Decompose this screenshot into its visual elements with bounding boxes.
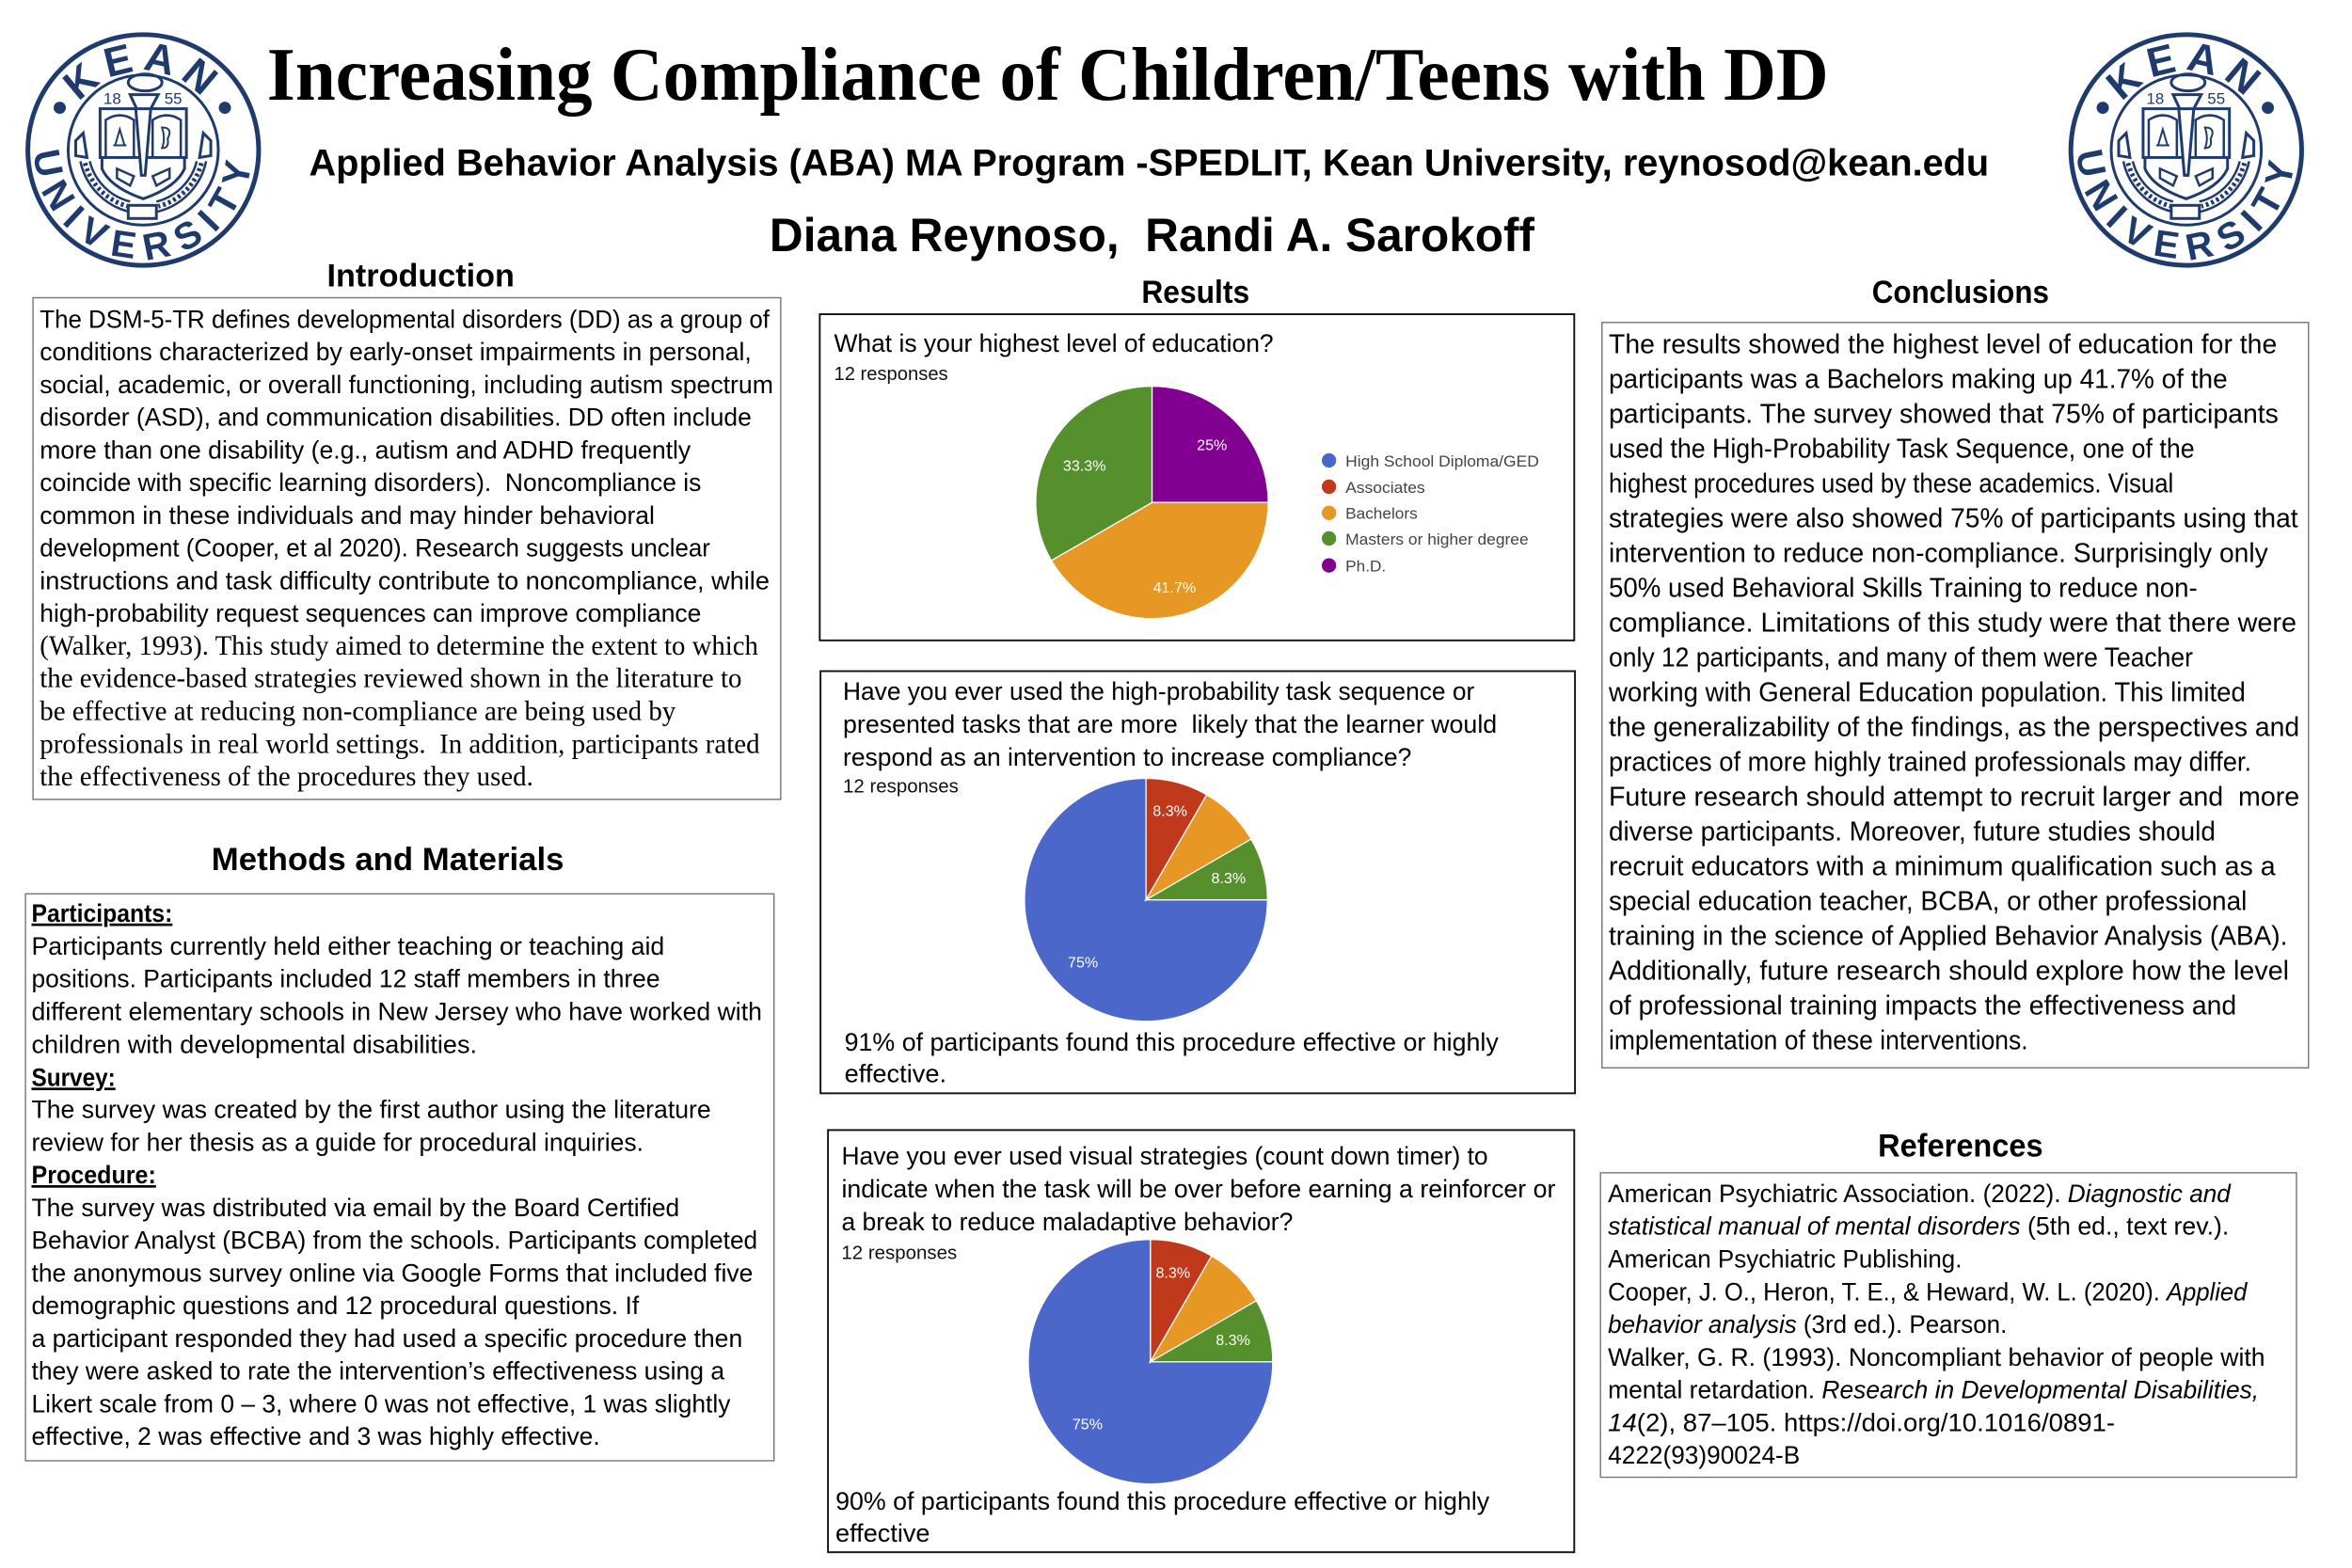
panel: references: 14(2), 87–105. https://doi.org/10.1016/0891- bbox=[1608, 1408, 2115, 1436]
panel: methods and materials: different elementary schools in New Jersey who have worked with bbox=[31, 997, 762, 1025]
panel: references: statistical manual of mental disorders (5th ed., text rev.). bbox=[1608, 1212, 2229, 1241]
panel: high-probability task sequence chart: 91% of participants found this procedure effective or highly bbox=[845, 1028, 1499, 1056]
panel: methods and materials: Participants: bbox=[31, 899, 172, 927]
panel: high-probability task sequence chart: Have you ever used the high-probability task sequence or bbox=[843, 677, 1474, 705]
panel: references: American Psychiatric Publishing. bbox=[1608, 1244, 1962, 1273]
panel: conclusions: intervention to reduce non-compliance. Surprisingly only bbox=[1609, 538, 2269, 568]
panel: high-probability task sequence chart: 12 responses bbox=[843, 777, 959, 798]
panel: conclusions: used the High-Probability Task Sequence, one of the bbox=[1609, 434, 2195, 464]
panel: conclusions: only 12 participants, and many of them were Teacher bbox=[1609, 642, 2193, 673]
pie chart: visual strategies: 8.3% bbox=[1216, 1332, 1250, 1349]
panel: introduction: the evidence-based strategies reviewed shown in the literature to bbox=[40, 663, 741, 694]
panel: high-probability task sequence chart: effective. bbox=[845, 1059, 946, 1087]
panel: methods and materials: the anonymous survey online via Google Forms that included five bbox=[31, 1259, 753, 1287]
panel: education chart: 12 responses bbox=[834, 364, 948, 385]
panel: conclusions: compliance. Limitations of this study were that there were bbox=[1609, 608, 2296, 638]
panel: methods and materials: Survey: bbox=[31, 1063, 116, 1091]
panel: introduction: social, academic, or overall functioning, including autism spectrum bbox=[40, 371, 773, 399]
panel: introduction: development (Cooper, et al 2020). Research suggests unclear bbox=[40, 534, 710, 562]
heading: Conclusions: Conclusions bbox=[1872, 275, 2049, 310]
logo: Kean University seal left: 55 bbox=[165, 90, 183, 108]
panel: methods and materials: The survey was distributed via email by the Board Certified bbox=[31, 1194, 679, 1222]
panel: high-probability task sequence chart: respond as an intervention to increase compliance? bbox=[843, 743, 1411, 771]
panel: introduction: professionals in real world settings. In addition, participants rated bbox=[40, 728, 760, 759]
panel: conclusions: Additionally, future research should explore how the level bbox=[1609, 956, 2289, 986]
legend: education: Ph.D. bbox=[1345, 558, 1386, 575]
panel: visual strategies chart: a break to reduce maladaptive behavior? bbox=[841, 1208, 1293, 1236]
panel: introduction: disorder (ASD), and communication disabilities. DD often include bbox=[40, 404, 752, 432]
pie chart: high-probability task sequence: 8.3% bbox=[1152, 802, 1187, 819]
pie chart: high-probability task sequence bbox=[1025, 779, 1267, 1022]
panel: introduction: (Walker, 1993). This study aimed to determine the extent to which bbox=[40, 630, 758, 661]
panel: references: American Psychiatric Association. (2022). Diagnostic and bbox=[1608, 1180, 2232, 1208]
panel: introduction: be effective at reducing non-compliance are being used by bbox=[40, 695, 675, 726]
pie chart: high-probability task sequence: 75% bbox=[1068, 954, 1098, 971]
panel: introduction: more than one disability (e.g., autism and ADHD frequently bbox=[40, 436, 691, 464]
heading: References: References bbox=[1878, 1128, 2043, 1164]
panel: methods and materials: Procedure: bbox=[31, 1161, 156, 1189]
pie chart: visual strategies bbox=[1028, 1240, 1273, 1484]
subtitle: Applied Behavior Analysis (ABA) MA Program -SPEDLIT, Kean University, reynosod@kean.edu bbox=[309, 142, 1989, 184]
panel: introduction: high-probability request sequences can improve compliance bbox=[40, 599, 701, 627]
logo: Kean University seal right: 55 bbox=[2207, 90, 2225, 108]
panel: conclusions: practices of more highly trained professionals may differ. bbox=[1609, 747, 2251, 777]
panel: methods and materials: Likert scale from 0 – 3, where 0 was not effective, 1 was slightly bbox=[31, 1389, 731, 1418]
panel: conclusions: participants. The survey showed that 75% of participants bbox=[1609, 399, 2279, 429]
panel: visual strategies chart: indicate when the task will be over before earning a reinforcer or bbox=[841, 1175, 1555, 1203]
pie chart: education bbox=[1036, 387, 1268, 619]
panel: conclusions: implementation of these interventions. bbox=[1609, 1025, 2028, 1055]
panel: methods and materials bbox=[25, 894, 774, 1461]
panel: references: mental retardation. Research in Developmental Disabilities, bbox=[1608, 1376, 2259, 1404]
panel: conclusions: special education teacher, BCBA, or other professional bbox=[1609, 886, 2247, 916]
panel: conclusions: working with General Education population. This limited bbox=[1608, 677, 2246, 707]
pie chart: high-probability task sequence: 8.3% bbox=[1211, 870, 1246, 887]
panel: conclusions: the generalizability of the findings, as the perspectives and bbox=[1609, 712, 2299, 742]
panel: visual strategies chart: effective bbox=[835, 1519, 930, 1547]
panel: conclusions: The results showed the highest level of education for the bbox=[1609, 330, 2277, 360]
logo: Kean University seal right: KEAN bbox=[2106, 43, 2262, 100]
panel: methods and materials: The survey was created by the first author using the literature bbox=[31, 1096, 711, 1124]
panel: conclusions: diverse participants. Moreover, future studies should bbox=[1609, 816, 2216, 847]
logo: Kean University seal left: 18 bbox=[103, 90, 121, 108]
panel: conclusions: Future research should attempt to recruit larger and more bbox=[1609, 782, 2299, 812]
logo: Kean University seal right: 18 bbox=[2146, 90, 2164, 108]
logo: Kean University seal left: KEAN bbox=[62, 43, 218, 100]
panel: introduction: the effectiveness of the procedures they used. bbox=[40, 761, 533, 792]
panel: introduction: The DSM-5-TR defines developmental disorders (DD) as a group of bbox=[40, 305, 770, 333]
legend: education: Associates bbox=[1345, 480, 1425, 497]
panel: conclusions: strategies were also showed 75% of participants using that bbox=[1609, 503, 2298, 533]
panel: visual strategies chart bbox=[828, 1130, 1574, 1552]
panel: high-probability task sequence chart bbox=[820, 672, 1575, 1093]
panel: methods and materials: effective, 2 was effective and 3 was highly effective. bbox=[31, 1422, 600, 1450]
panel: introduction: conditions characterized by early-onset impairments in personal, bbox=[40, 338, 752, 366]
heading: Methods and Materials: Methods and Materials bbox=[212, 842, 564, 878]
heading: Introduction: Introduction bbox=[327, 259, 515, 294]
pie chart: visual strategies: 8.3% bbox=[1155, 1264, 1190, 1281]
authors: Diana Reynoso, Randi A. Sarokoff bbox=[770, 209, 1534, 261]
pie chart: education: 41.7% bbox=[1153, 579, 1196, 596]
panel: high-probability task sequence chart: presented tasks that are more likely that the learner would bbox=[843, 710, 1497, 738]
panel: introduction: common in these individuals and may hinder behavioral bbox=[40, 501, 655, 530]
logo: Kean University seal left: UNIVERSITY bbox=[34, 150, 250, 261]
logo: Kean University seal right: UNIVERSITY bbox=[2077, 150, 2293, 261]
panel: references: Cooper, J. O., Heron, T. E., & Heward, W. L. (2020). Applied bbox=[1608, 1277, 2248, 1306]
panel: conclusions: recruit educators with a minimum qualification such as a bbox=[1609, 851, 2276, 881]
pie chart: education: 25% bbox=[1197, 436, 1227, 453]
pie chart: visual strategies: 75% bbox=[1073, 1416, 1103, 1433]
panel: conclusions: highest procedures used by these academics. Visual bbox=[1609, 468, 2173, 499]
panel: visual strategies chart: 90% of participants found this procedure effective or highly bbox=[835, 1487, 1490, 1515]
panel: methods and materials: demographic questions and 12 procedural questions. If bbox=[31, 1291, 640, 1320]
panel: methods and materials: review for her thesis as a guide for procedural inquiries. bbox=[31, 1128, 644, 1156]
legend: education bbox=[1322, 453, 1539, 575]
panel: methods and materials: children with developmental disabilities. bbox=[31, 1030, 477, 1058]
pie chart: education: 33.3% bbox=[1063, 458, 1106, 475]
panel: education chart: What is your highest level of education? bbox=[834, 329, 1274, 357]
logo: Kean University seal right bbox=[2068, 32, 2304, 268]
panel: methods and materials: a participant responded they had used a specific procedure then bbox=[31, 1324, 742, 1353]
panel: methods and materials: they were asked to rate the intervention’s effectiveness using a bbox=[31, 1357, 724, 1386]
panel: references: 4222(93)90024-B bbox=[1608, 1441, 1800, 1469]
logo: Kean University seal left bbox=[25, 32, 262, 268]
legend: education: High School Diploma/GED bbox=[1345, 453, 1539, 470]
panel: methods and materials: Participants currently held either teaching or teaching aid bbox=[31, 932, 664, 960]
panel: methods and materials: Behavior Analyst (BCBA) from the schools. Participants completed bbox=[31, 1227, 757, 1255]
legend: education: Masters or higher degree bbox=[1345, 531, 1529, 548]
panel: conclusions: of professional training impacts the effectiveness and bbox=[1609, 990, 2236, 1021]
panel: references: behavior analysis (3rd ed.). Pearson. bbox=[1608, 1310, 2007, 1338]
panel: references: Walker, G. R. (1993). Noncompliant behavior of people with bbox=[1608, 1343, 2265, 1371]
legend: education: Bachelors bbox=[1345, 506, 1418, 523]
panel: conclusions bbox=[1602, 323, 2309, 1068]
heading: Results: Results bbox=[1141, 275, 1249, 310]
panel: education chart bbox=[819, 314, 1574, 641]
panel: conclusions: 50% used Behavioral Skills Training to reduce non- bbox=[1609, 573, 2198, 603]
panel: introduction: coincide with specific learning disorders). Noncompliance is bbox=[40, 468, 701, 497]
title: Increasing Compliance of Children/Teens with DD bbox=[267, 33, 1829, 117]
panel: conclusions: participants was a Bachelors making up 41.7% of the bbox=[1609, 365, 2228, 395]
panel: introduction: instructions and task difficulty contribute to noncompliance, while bbox=[40, 566, 770, 594]
panel: references bbox=[1600, 1173, 2296, 1478]
panel: visual strategies chart: Have you ever used visual strategies (count down timer) to bbox=[841, 1142, 1488, 1170]
panel: introduction bbox=[33, 298, 781, 800]
panel: conclusions: training in the science of Applied Behavior Analysis (ABA). bbox=[1609, 921, 2287, 951]
panel: visual strategies chart: 12 responses bbox=[841, 1243, 957, 1264]
panel: methods and materials: positions. Participants included 12 staff members in three bbox=[31, 965, 660, 993]
